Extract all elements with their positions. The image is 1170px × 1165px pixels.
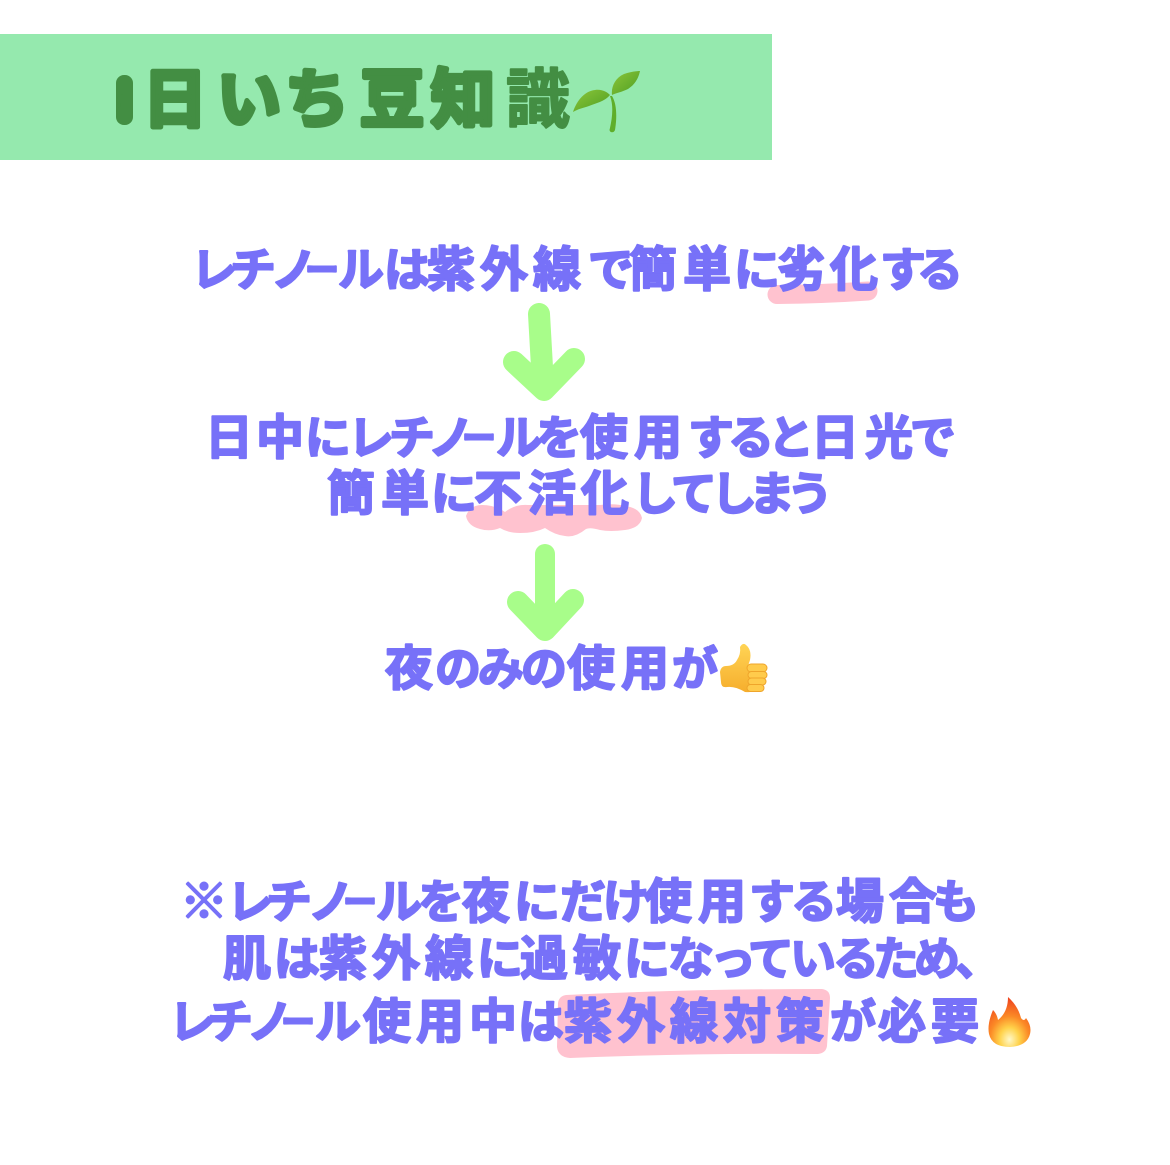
- text: line 3: してしまう: [632, 468, 833, 520]
- text: note line 1: ルを: [376, 876, 464, 928]
- text: note line 1: 使用: [644, 876, 746, 929]
- text: note line 2: 紫外線: [319, 933, 473, 986]
- text: note line 2: 過敏: [520, 933, 621, 986]
- text: note line 2: 肌: [223, 933, 271, 986]
- text: note line 1: ー: [343, 884, 377, 922]
- text: line 4: 夜: [385, 643, 433, 696]
- text: note line 1: レチノ: [227, 876, 354, 928]
- text: note line 1: にだけ: [514, 876, 649, 928]
- text: line 1: する: [880, 244, 963, 296]
- text: note line 3: が: [830, 996, 876, 1048]
- title numeral bar: [116, 75, 133, 125]
- text: line 4: 使用: [567, 643, 669, 696]
- icon: thumbs up: [720, 644, 767, 692]
- text: line 1: に: [734, 244, 780, 296]
- text: note line 3: は: [518, 996, 564, 1048]
- text: line 1: ー: [305, 252, 339, 290]
- text: note line 1: 場合: [836, 876, 937, 929]
- text: note line 1: 夜: [462, 876, 510, 929]
- arrow 2: [518, 554, 573, 630]
- text: line 1: レチノ: [191, 244, 317, 296]
- title banner: [0, 34, 772, 160]
- text: line 2: で: [910, 412, 956, 464]
- text: note line 3: ー: [281, 1004, 315, 1042]
- text: note line 1: する: [749, 876, 837, 928]
- text: line 2: すると: [688, 412, 814, 464]
- text: note line 2: に: [477, 933, 523, 985]
- text: line 4: のみの: [435, 643, 567, 695]
- text: line 2: 日光: [811, 412, 913, 465]
- highlight: box 紫外線対策: [557, 989, 830, 1058]
- text: note line 1: ※: [180, 876, 228, 929]
- text: line 2: にレチノ: [305, 412, 474, 464]
- text: note line 3: レチノ: [169, 996, 293, 1048]
- text: note line 3: 必要: [878, 996, 979, 1049]
- title text: 1: [118, 92, 130, 117]
- text: line 3: 簡単: [327, 468, 429, 521]
- text: note line 3: 使用中: [363, 996, 517, 1049]
- text: note line 2: になっているため、: [624, 933, 1001, 985]
- text: line 1: 劣化: [777, 244, 878, 297]
- text: line 3: 不活化: [474, 468, 629, 521]
- text: note line 2: は: [274, 933, 320, 985]
- text: line 2: ルを: [496, 412, 582, 464]
- text: line 1: ルは: [338, 244, 430, 296]
- text: note line 1: も: [933, 876, 979, 928]
- text: note line 3: ル: [315, 996, 361, 1048]
- title text: 日いち豆知: [143, 64, 495, 136]
- text: line 1: 紫外線: [427, 244, 581, 297]
- arrow 1: [514, 314, 574, 390]
- text: line 2: ー: [462, 420, 496, 458]
- highlight: wavy underline 不活化: [466, 504, 642, 536]
- text: line 1: 簡単: [629, 244, 731, 297]
- highlight: underline 劣化: [777, 291, 868, 294]
- icon: sprout: [573, 71, 640, 132]
- text: line 4: が: [672, 643, 718, 695]
- icon: fire: [988, 997, 1030, 1047]
- text: line 1: で: [588, 244, 634, 296]
- text: note line 3: 紫外線対策: [564, 996, 824, 1049]
- title text: 識: [506, 64, 570, 136]
- text: line 2: 使用: [580, 412, 682, 465]
- text: line 2: 日中: [205, 412, 304, 465]
- text: line 3: に: [431, 468, 477, 520]
